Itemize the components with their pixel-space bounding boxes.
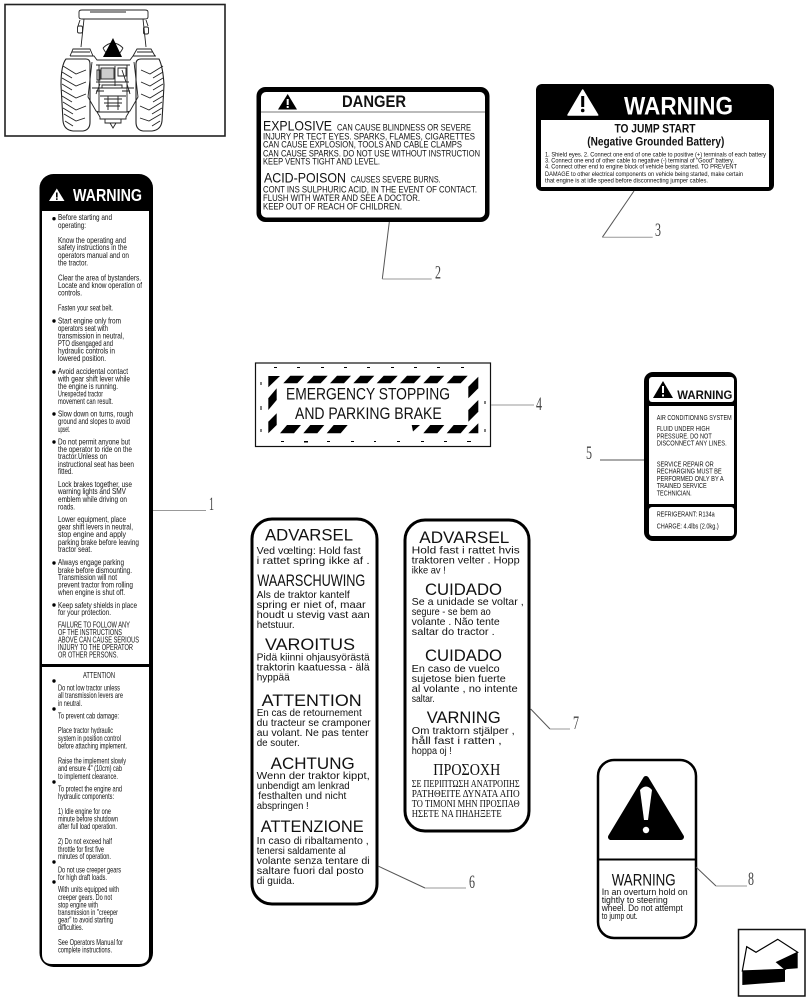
text block: warning instructions: transmission in neutral, <box>58 330 124 340</box>
text block: acid poison: CAUSES SEVERE BURNS. <box>351 174 441 185</box>
text: german <box>257 771 370 812</box>
text block: acid poison: FLUSH WITH WATER AND SEE A DOCTOR. <box>263 193 420 204</box>
icon: warning triangle with exclamation <box>611 779 681 837</box>
text: norwegian: traktoren velter . Hopp <box>412 556 520 566</box>
callout: leader 4: 4 <box>536 394 542 415</box>
heading: waarschuwing: WAARSCHUWING <box>257 572 365 590</box>
heading: attention: ATTENTION <box>262 692 362 710</box>
hazard stripes <box>260 367 486 442</box>
text block: warning instructions: Do not permit anyone but <box>58 436 131 446</box>
text: french: de souter. <box>257 738 300 749</box>
icon: navigation arrow <box>738 930 805 996</box>
text block: warning instructions: movement can result. <box>58 396 113 406</box>
text: italian: saltare fuori dal posto <box>257 866 364 877</box>
text: italian: volante senza tentare di <box>257 856 370 867</box>
text block: overturn instructions: to jump out. <box>602 911 638 921</box>
text block: attention instructions: ATTENTION <box>83 670 115 680</box>
text block: attention instructions: Do not low tractor unless <box>58 682 120 692</box>
text: spanish <box>412 664 518 705</box>
callout: leader 2 <box>382 222 441 283</box>
text: french: En cas de retournement <box>257 708 362 719</box>
text: dutch: hetstuur. <box>257 620 295 631</box>
text: emergency stopping: EMERGENCY STOPPING <box>286 384 450 403</box>
text block: warning instructions: tractor.Unless on <box>58 451 107 461</box>
text block: warning instructions: fitted. <box>58 466 73 476</box>
text block: warning instructions: brake before dismounting. <box>58 565 132 575</box>
text: spanish: al volante , no intente <box>412 684 518 695</box>
text block: attention instructions <box>58 670 127 954</box>
text: german: unbendigt am lenkrad <box>257 781 350 792</box>
heading: cuidado spanish: CUIDADO <box>425 647 502 665</box>
text block: ac warning: SERVICE REPAIR OR <box>657 459 714 468</box>
text block: ac warning: AIR CONDITIONING SYSTEM <box>657 413 732 422</box>
callout: leader 2: 2 <box>435 262 441 283</box>
text block: acid poison: CONT INS SULPHURIC ACID, IN THE EVENT OF CONTACT. <box>263 185 477 196</box>
text block: warning instructions: OR OTHER PERSONS. <box>58 650 118 660</box>
text block: warning instructions: with gear shift lever while <box>57 374 130 384</box>
text: italian <box>257 836 370 887</box>
text block: explosive: EXPLOSIVE <box>263 118 332 134</box>
text block: attention instructions: minute before shutdown <box>58 814 118 824</box>
text: danish: i rattet spring ikke af . <box>257 556 370 567</box>
panel: tractor thumbnail <box>5 4 225 136</box>
text block: overturn instructions: tightly to steering <box>602 895 668 905</box>
text: swedish: hoppa oj ! <box>412 746 452 757</box>
text: french <box>257 708 371 749</box>
text block: warning instructions: Avoid accidental contact <box>58 366 129 376</box>
text block: attention instructions: all transmission levers are <box>58 690 123 700</box>
text: norwegian: ikke av ! <box>412 566 446 576</box>
text: greek: ΗΣΕΤΕ ΝΑ ΠΗΔΗΞΕΤΕ <box>412 809 502 820</box>
callout: leader 1 <box>153 494 214 515</box>
text: dutch <box>257 590 370 631</box>
text: french: au volant. Ne pas tenter <box>257 728 369 739</box>
text block: attention instructions: to implement clearance. <box>58 771 118 781</box>
text block: warning instructions: ABOVE CAN CAUSE SERIOUS <box>58 634 139 644</box>
callout: leader 6: 6 <box>469 872 475 893</box>
text: portuguese: volante . Não tente <box>412 617 500 628</box>
text block: ac warning: RECHARGING MUST BE <box>657 466 722 476</box>
text: portuguese: saltar do tractor . <box>412 627 495 638</box>
text block: attention instructions: after full load operation. <box>58 821 117 831</box>
heading: cuidado portuguese: CUIDADO <box>425 581 502 599</box>
text block: warning instructions: PTO disengaged and <box>58 338 113 348</box>
text block: jump start steps: 1. Shield eyes. 2. Connect one end of one cable to positive (+) terminals of each battery <box>545 152 767 159</box>
text block: attention instructions: Place tractor hydraulic <box>58 725 113 735</box>
text block: attention instructions: gear" to avoid starting <box>58 914 113 924</box>
callout: leader 6 <box>378 866 475 893</box>
text block: explosive <box>263 118 480 168</box>
text: french: du tracteur se cramponer <box>257 718 371 729</box>
text: finnish: hyppää <box>257 672 290 684</box>
callout: leader 8: 8 <box>748 869 754 890</box>
text: italian: tenersi saldamente al <box>257 846 346 857</box>
text: danish <box>257 546 370 567</box>
text block: warning instructions: when engine is shut off. <box>57 587 125 597</box>
text: italian: In caso di ribaltamento , <box>257 836 369 847</box>
text block: attention instructions: With units equipped with <box>58 884 119 894</box>
text: swedish <box>412 726 515 757</box>
text block: warning instructions: INJURY TO THE OPERATOR <box>58 642 133 652</box>
text block: warning instructions: Unexpected tractor <box>58 388 103 398</box>
text block: warning instructions: ground and slopes to avoid <box>58 416 130 426</box>
text block: acid poison: ACID-POISON <box>264 170 346 186</box>
heading: attenzione: ATTENZIONE <box>261 818 364 836</box>
text block: warning instructions: upset. <box>58 424 70 434</box>
text block: attention instructions: To prevent cab damage: <box>58 710 119 720</box>
text block: warning instructions: OF THE INSTRUCTIONS <box>58 627 122 637</box>
text block: attention instructions: To protect the engine and <box>58 784 122 794</box>
callout: leader 1: 1 <box>209 494 214 515</box>
text block: warning instructions: instructional seat has been <box>58 459 134 469</box>
text block: attention instructions: transmission in "creeper <box>58 907 118 917</box>
text block: warning instructions: prevent tractor from rolling <box>58 580 133 590</box>
heading: achtung: ACHTUNG <box>271 755 355 773</box>
text: portuguese: segure - se bem ao <box>412 607 491 618</box>
text: greek: ΣΕ ΠΕΡΙΠΤΩΣΗ ΑΝΑΤΡΟΠΗΣ <box>412 779 520 790</box>
text block: warning instructions: the engine is running. <box>58 381 118 391</box>
callout: leader 7: 7 <box>573 713 579 734</box>
text block: warning instructions: Transmission will not <box>58 572 118 582</box>
text block: overturn instructions: wheel. Do not attempt <box>601 903 683 913</box>
text block: attention instructions: 1) Idle engine for one <box>58 806 111 816</box>
text: german: Wenn der traktor kippt, <box>257 771 370 782</box>
text block: warning instructions: Clear the area of bystanders. <box>58 272 141 282</box>
callout: leader 3: 3 <box>655 220 661 241</box>
heading: advarsel: ADVARSEL <box>265 526 353 544</box>
callout: leader 5 <box>586 443 644 464</box>
heading: warning: WARNING <box>73 185 142 205</box>
text block: warning instructions: roads. <box>58 502 75 512</box>
text block: jump start steps: DAMAGE to other electrical components on vehicle being started, make certain <box>545 171 744 178</box>
text block: warning instructions: warning lights and SMV <box>57 486 126 496</box>
text block: overturn instructions <box>601 887 688 921</box>
text: norwegian: Hold fast i rattet hvis <box>412 546 520 556</box>
text block: warning instructions: stop engine and apply <box>58 529 127 539</box>
text block: warning instructions: Start engine only from <box>58 316 121 326</box>
text: italian: di guida. <box>257 876 295 887</box>
callout: leader 5: 5 <box>586 443 592 464</box>
panel: label 4 emergency stopping <box>256 363 490 446</box>
text block: ac warning <box>657 413 732 498</box>
text block: warning instructions: FAILURE TO FOLLOW ANY <box>58 620 130 630</box>
text block: warning instructions: emblem while driving on <box>58 494 127 504</box>
text block: attention instructions: difficulties. <box>58 922 83 932</box>
text block: explosive: INJURY PR TECT EYES. SPARKS, FLAMES, CIGARETTES <box>263 131 475 142</box>
text: finnish: traktorin kaatuessa - älä <box>257 662 370 674</box>
text block: attention instructions: Do not use creeper gears <box>58 864 121 874</box>
heading: warning: WARNING <box>677 388 732 402</box>
text: spanish: saltar. <box>412 694 435 705</box>
bullets <box>52 217 56 884</box>
text block: warning instructions: hydraulic controls in <box>58 346 115 356</box>
text block: refrigerant: REFRIGERANT: R134a <box>657 510 715 519</box>
text block: acid poison: KEEP OUT OF REACH OF CHILDREN. <box>263 202 402 213</box>
text block: warning instructions: operators manual and on <box>58 250 129 260</box>
text block: jump start steps <box>545 152 767 185</box>
text: dutch: Als de traktor kantelf <box>257 590 350 601</box>
panel: label 1 long warning <box>40 174 153 967</box>
callout: leader 3 <box>602 191 661 241</box>
text block: warning instructions: safety instructions in the <box>58 242 127 252</box>
text block: jump start steps: 4. Connect other end to engine block of vehicle being started. TO PREVENT <box>545 164 737 171</box>
panel: label 8 overturn warning <box>598 760 696 938</box>
icon: warning triangle white <box>568 90 598 115</box>
text block: warning instructions: gear shift levers in neutral, <box>58 522 133 532</box>
text: norwegian <box>412 546 520 576</box>
text: portuguese: Se a unidade se voltar , <box>412 597 524 608</box>
text: spanish: En caso de vuelco <box>412 664 500 675</box>
heading: warning: WARNING <box>624 92 733 120</box>
text block: attention instructions: minutes of operation. <box>58 851 111 861</box>
text: dutch: houdt u stevig vast aan <box>257 610 370 621</box>
panel: label 2 danger <box>256 87 490 222</box>
text block: warning instructions: the tractor. <box>58 258 88 268</box>
text: swedish: håll fast i ratten , <box>412 735 502 747</box>
text block: ac warning: PERFORMED ONLY BY A <box>657 474 724 483</box>
heading: warning: WARNING <box>612 872 676 890</box>
text: greek <box>412 779 520 820</box>
text: parking brake: AND PARKING BRAKE <box>295 404 442 423</box>
text block: acid poison <box>263 170 477 213</box>
text block: attention instructions: See Operators Manual for <box>58 937 123 947</box>
text: german: abspringen ! <box>257 801 309 812</box>
text block: attention instructions: 2) Do not exceed half <box>58 836 112 846</box>
text block: warning instructions <box>57 212 143 659</box>
text block: ac warning: FLUID UNDER HIGH <box>657 424 710 433</box>
text: portuguese <box>412 597 524 638</box>
text: greek: ΡΑΤΗΘΕΙΤΕ ΔΥΝΑΤΑ ΑΠΟ <box>412 789 520 800</box>
text: dutch: spring er niet of, maar <box>257 600 366 611</box>
text block: warning instructions: Know the operating and <box>58 235 126 245</box>
text block: jump start steps: 3. Connect one end of other cable to negative (-) terminal of "Good" battery. <box>545 158 734 165</box>
text: danish: Ved vœlting: Hold fast <box>257 546 361 557</box>
text block: warning instructions: Slow down on turns, rough <box>58 408 133 418</box>
text block: ac warning: PRESSURE. DO NOT <box>657 431 712 440</box>
text block: warning instructions: tractor seat. <box>58 544 92 554</box>
text block: ac warning: TECHNICIAN. <box>657 488 692 498</box>
heading: varoitus: VAROITUS <box>265 636 355 654</box>
text block: refrigerant <box>657 510 719 530</box>
text block: attention instructions: stop engine with <box>58 900 98 910</box>
text: swedish: Om traktorn stjälper , <box>412 726 515 737</box>
text block: warning instructions: operating: <box>58 220 86 230</box>
text: german: festhalten und nicht <box>258 791 346 802</box>
text block: attention instructions: for high draft loads. <box>58 872 107 882</box>
text block: warning instructions: controls. <box>58 288 82 298</box>
heading: advarsel: ADVARSEL <box>419 529 509 547</box>
heading: to jump start: TO JUMP START <box>614 122 696 136</box>
text block: ac warning: TRAINED SERVICE <box>657 481 707 490</box>
text block: warning instructions: Always engage parking <box>58 557 124 567</box>
text block: attention instructions: in neutral. <box>58 698 82 708</box>
text block: explosive: KEEP VENTS TIGHT AND LEVEL. <box>263 157 380 168</box>
text block: warning instructions: the operator to ride on the <box>58 444 132 454</box>
text block: attention instructions: hydraulic components: <box>58 791 114 801</box>
text block: attention instructions: and ensure 4" (10cm) cab <box>58 763 122 773</box>
text block: warning instructions: parking brake before leaving <box>58 537 139 547</box>
callout: leader 7 <box>531 709 579 734</box>
text: finnish: Pidä kiinni ohjausyörästä <box>257 652 370 664</box>
text: finnish <box>257 652 370 684</box>
text block: warning instructions: Locate and know operation of <box>58 280 143 290</box>
text block: warning instructions: operators seat with <box>58 323 108 333</box>
icon: warning triangle <box>49 188 64 201</box>
text block: refrigerant: CHARGE: 4.4lbs (2.0kg.) <box>657 521 719 530</box>
text block: warning instructions: for your protection. <box>58 607 111 617</box>
text block: overturn instructions: In an overturn hold on <box>602 887 688 897</box>
text block: attention instructions: complete instructions. <box>58 944 112 954</box>
text block: attention instructions: system in position control <box>58 733 121 743</box>
text block: ac warning: DISCONNECT ANY LINES. <box>657 439 727 448</box>
text block: warning instructions: lowered position. <box>58 353 106 363</box>
panel: label 5 air conditioning warning <box>644 372 737 541</box>
heading: greek: ΠΡΟΣΟΧΗ <box>433 760 500 779</box>
panel: label 7 multilingual warning <box>405 520 529 831</box>
panel: label 3 jump start warning <box>536 84 774 191</box>
callout: leader 4 <box>491 394 542 415</box>
text block: warning instructions: Fasten your seat belt. <box>58 302 113 312</box>
text block: explosive: CAN CAUSE EXPLOSION, TOOLS AND CABLE CLAMPS <box>263 140 462 151</box>
icon: tractor rear view <box>61 10 164 131</box>
text block: warning instructions: Lock brakes together, use <box>58 479 132 489</box>
text block: explosive: CAN CAUSE BLINDNESS OR SEVERE <box>337 122 471 134</box>
text block: warning instructions: Keep safety shields in place <box>58 600 137 610</box>
text: spanish: sujetose bien fuerte <box>412 674 506 685</box>
icon: danger triangle <box>278 94 297 110</box>
text block: attention instructions: Raise the implement slowly <box>58 756 127 766</box>
text block: attention instructions: throttle for first five <box>58 844 104 854</box>
text block: jump start steps: that engine is at idle speed before disconnecting jumper cables. <box>545 178 708 185</box>
heading: negative grounded battery: (Negative Grounded Battery) <box>587 135 724 149</box>
text block: attention instructions: creeper gears. Do not <box>58 892 112 902</box>
callout: leader 8 <box>696 867 754 890</box>
text block: warning instructions: Lower equipment, place <box>58 514 126 524</box>
panel: label 6 multilingual warning <box>252 519 377 904</box>
icon: black triangle marker <box>103 38 122 57</box>
text block: attention instructions: before attaching implement. <box>58 740 127 750</box>
heading: varning: VARNING <box>427 709 501 727</box>
text: greek: ΤΟ ΤΙΜΟΝΙ ΜΗΝ ΠΡΟΣΠΑΘ <box>412 799 520 810</box>
heading: danger: DANGER <box>342 92 406 111</box>
text block: explosive: CAN CAUSE SPARKS. DO NOT USE WITHOUT INSTRUCTION <box>263 148 480 159</box>
text block: warning instructions: Before starting and <box>58 212 112 222</box>
icon: warning triangle <box>653 381 673 398</box>
